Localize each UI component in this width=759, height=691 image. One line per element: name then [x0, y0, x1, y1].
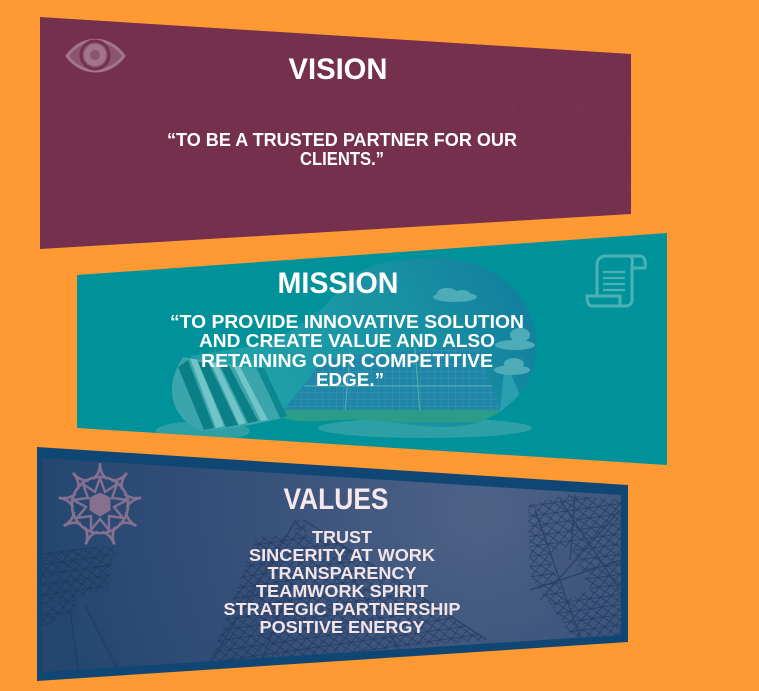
text: mission statement: AND CREATE VALUE AND ALSO	[199, 330, 495, 351]
icon: scroll	[587, 256, 645, 306]
text: mission statement: EDGE.”	[316, 369, 384, 390]
image: transmission towers	[42, 495, 621, 670]
panel: values	[37, 447, 628, 681]
icon: star emblem	[57, 463, 143, 547]
text: values list	[224, 527, 461, 637]
icon: eye	[67, 40, 124, 71]
text: vision statement: CLIENTS.”	[300, 149, 384, 169]
bulb screw base	[172, 357, 287, 431]
text: values list: SINCERITY AT WORK	[249, 545, 435, 565]
text: values list: TRUST	[312, 527, 372, 547]
text: mission statement	[170, 311, 524, 390]
panel: vision	[40, 17, 631, 249]
text: values list: POSITIVE ENERGY	[260, 617, 425, 637]
text: vision statement	[167, 130, 517, 169]
infographic canvas	[37, 17, 667, 681]
text: values list: STRATEGIC PARTNERSHIP	[224, 599, 461, 619]
text: mission statement: RETAINING OUR COMPETITIVE	[201, 350, 493, 371]
text: vision statement: “TO BE A TRUSTED PARTNER FOR OUR	[167, 130, 517, 150]
heading: values: VALUES	[284, 483, 388, 516]
heading: mission: MISSION	[278, 267, 398, 300]
text: values list: TRANSPARENCY	[268, 563, 417, 583]
panel: mission	[77, 233, 667, 465]
text: mission statement: “TO PROVIDE INNOVATIVE SOLUTION	[170, 311, 524, 332]
image: light bulb with solar panels	[156, 258, 536, 441]
text: values list: TEAMWORK SPIRIT	[256, 581, 428, 601]
heading: vision: VISION	[288, 53, 388, 86]
